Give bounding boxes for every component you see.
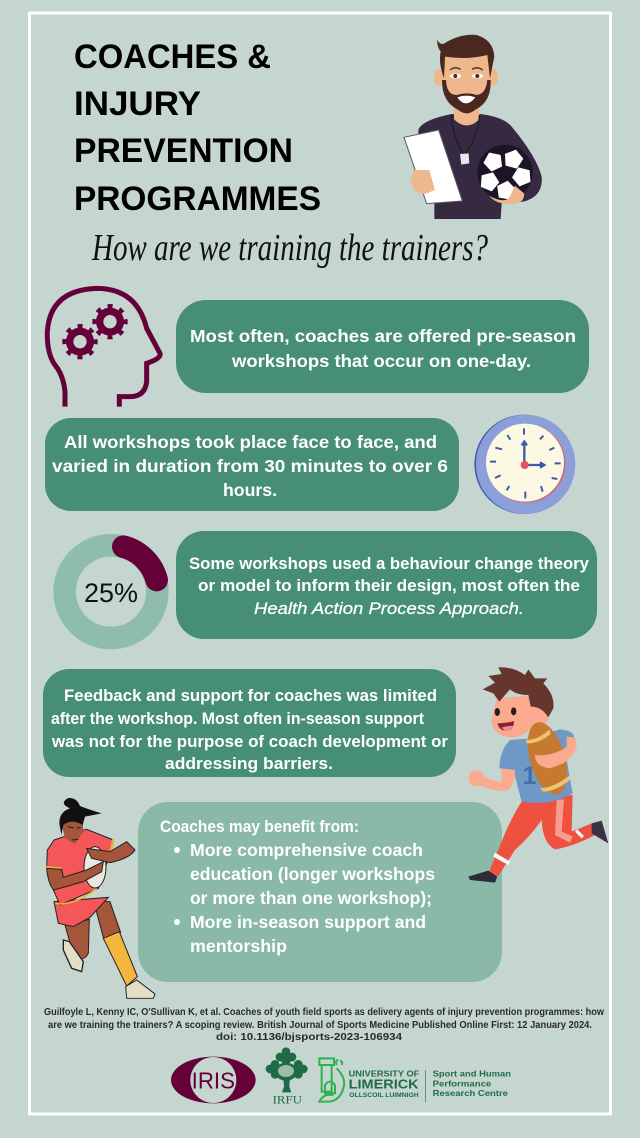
icon: boy running with rugby ball: [468, 667, 608, 883]
logo: University of Limerick: LIMERICK: [349, 1077, 420, 1091]
panel: coaches may benefit from: More comprehensive coach: [190, 840, 423, 860]
icon: head with gears: [47, 288, 160, 407]
panel: coaches may benefit from: education (longer workshops: [190, 864, 435, 884]
logo text: Sport and Human Performance Research Centre: Performance: [433, 1078, 491, 1088]
icon: coach with clipboard and football: [404, 35, 542, 219]
panel: coaches may benefit from: mentorship: [190, 936, 287, 956]
panel: coaches may benefit from: Coaches may benefit from:: [160, 818, 359, 836]
panel: behaviour change theory: Health Action Process Approach.: [254, 600, 524, 618]
logo: IRIS: IRIS: [192, 1067, 235, 1093]
icon: woman rugby player: [46, 798, 155, 998]
logo: IRFU: IRFU: [273, 1095, 302, 1107]
panel: feedback and support: after the workshop. Most often in-season support: [51, 710, 425, 728]
icon: clock: [474, 415, 575, 514]
panel: face to face workshops: [45, 418, 459, 511]
panel: coaches may benefit from: More in-season support and: [190, 912, 426, 932]
panel: feedback and support: addressing barriers.: [165, 755, 333, 773]
panel: feedback and support: [43, 669, 456, 777]
logo: University of Limerick: OLLSCOIL LUIMNIGH: [349, 1092, 419, 1099]
icon: boy running with rugby ball: 1: [523, 762, 537, 790]
panel: feedback and support: Feedback and support for coaches was limited: [64, 687, 437, 705]
logo text: Sport and Human Performance Research Centre: Research Centre: [433, 1088, 508, 1098]
panel: feedback and support: was not for the purpose of coach development or: [51, 733, 449, 751]
logo: IRIS: [171, 1057, 256, 1103]
title: COACHES &: [74, 38, 271, 76]
title: PROGRAMMES: [74, 180, 321, 218]
panel: face to face workshops: varied in duration from 30 minutes to over 6: [52, 456, 448, 476]
chart: 25 percent donut: 25%: [84, 578, 138, 608]
panel: face to face workshops: All workshops took place face to face, and: [64, 432, 437, 452]
citation: doi: 10.1136/bjsports-2023-106934: [216, 1032, 403, 1043]
panel: pre-season workshops: Most often, coaches are offered pre-season: [190, 326, 576, 346]
logo: University of Limerick: [319, 1058, 426, 1102]
citation: Guilfoyle L, Kenny IC, O'Sullivan K, et al. Coaches of youth field sports as delivery agents of injury prevention programmes: how: [44, 1007, 604, 1018]
chart: 25 percent donut: [65, 545, 157, 638]
panel: pre-season workshops: workshops that occur on one-day.: [231, 351, 531, 371]
title: [74, 38, 321, 218]
logo text: Sport and Human Performance Research Centre: Sport and Human: [433, 1069, 511, 1079]
logo: University of Limerick: UNIVERSITY OF: [349, 1069, 419, 1079]
logo: IRFU: [266, 1047, 308, 1107]
panel: behaviour change theory: or model to inform their design, most often the: [198, 577, 580, 595]
title: INJURY: [74, 85, 201, 123]
panel: coaches may benefit from: or more than one workshop);: [190, 888, 432, 908]
logo text: Sport and Human Performance Research Centre: [433, 1069, 511, 1098]
panel: pre-season workshops: [176, 300, 589, 393]
panel: behaviour change theory: Some workshops used a behaviour change theory: [189, 555, 589, 573]
citation: are we training the trainers? A scoping review. British Journal of Sports Medicine Published Online First: 12 January 2024.: [48, 1020, 592, 1031]
panel: face to face workshops: hours.: [223, 480, 277, 500]
title: PREVENTION: [74, 132, 293, 170]
panel: coaches may benefit from: [138, 802, 502, 982]
citation: [44, 1007, 604, 1043]
subtitle: How are we training the trainers?: [91, 227, 488, 269]
panel: behaviour change theory: [176, 531, 597, 639]
